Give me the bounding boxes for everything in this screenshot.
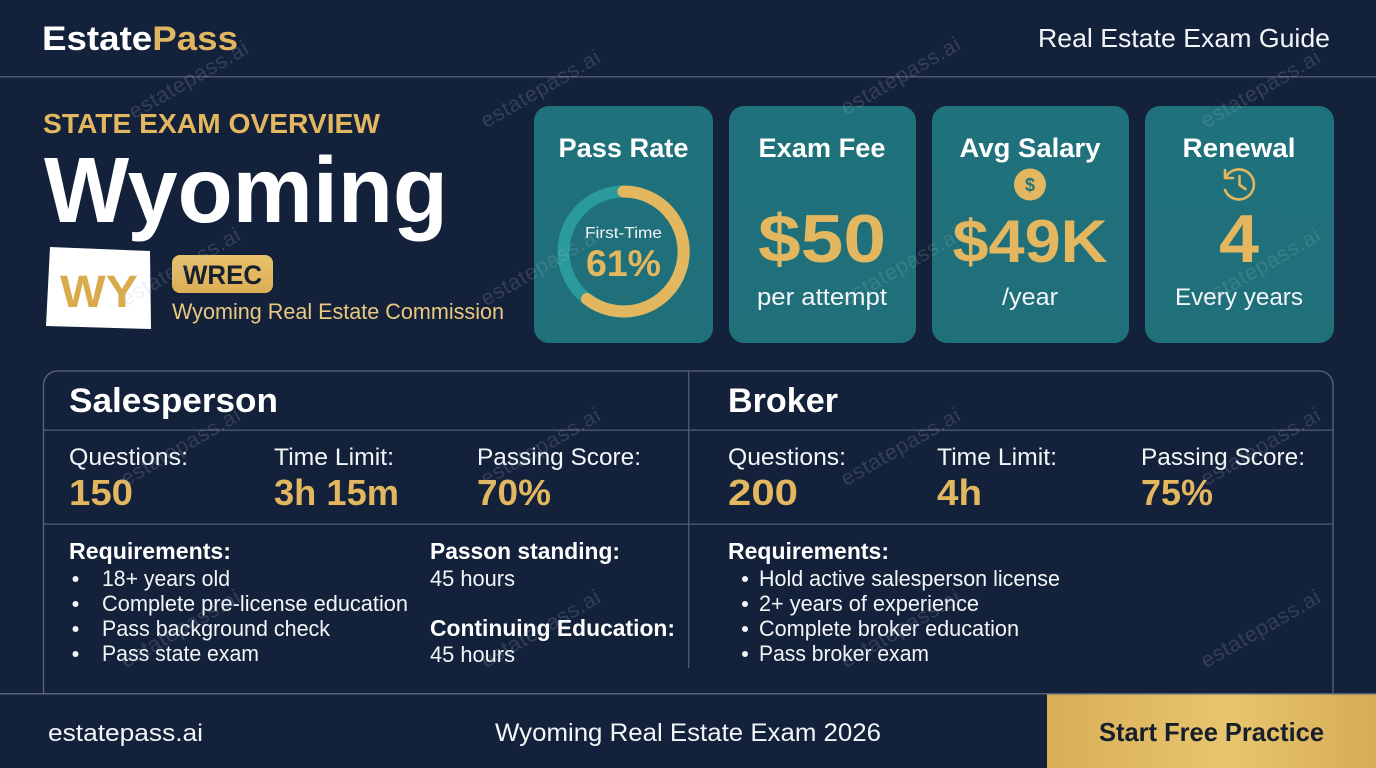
- watermarks: estatepass.ai: [124, 36, 253, 124]
- stat: questions: 200: [728, 472, 798, 513]
- stat: time limit: Time Limit:: [937, 444, 1057, 471]
- watermarks: estatepass.ai: [116, 403, 245, 491]
- logo: EstatePass: [42, 20, 238, 58]
- stat: passing score: 75%: [1141, 472, 1213, 513]
- stat: questions: 150: [69, 472, 133, 513]
- stat: time limit: 4h: [937, 472, 982, 513]
- call to action button: Start Free Practice: [1099, 717, 1324, 747]
- card: exam fee: [729, 106, 916, 343]
- requirements list: 18+ years old: [102, 566, 230, 591]
- watermarks: [116, 32, 1325, 673]
- requirements list: Complete broker education: [759, 616, 1019, 641]
- card: pass rate: Pass Rate: [558, 133, 688, 163]
- stat: time limit: 3h 15m: [274, 472, 399, 513]
- footer title: Wyoming Real Estate Exam 2026: [495, 719, 881, 747]
- icon: dollar coin: [1014, 168, 1046, 200]
- header guide label: Real Estate Exam Guide: [1038, 23, 1330, 53]
- commission name: Wyoming Real Estate Commission: [172, 299, 504, 324]
- stat: passing score: Passing Score:: [477, 444, 641, 471]
- watermarks: estatepass.ai: [836, 32, 965, 120]
- state badge: [46, 247, 151, 329]
- card: average salary: $49K: [952, 208, 1108, 275]
- icon: Wyoming shape: [46, 247, 151, 329]
- stat: time limit: Time Limit:: [274, 444, 394, 471]
- panel: salesperson: [69, 382, 675, 667]
- donut chart: 61%: [586, 243, 661, 284]
- watermarks: estatepass.ai: [836, 585, 965, 673]
- good standing hours: 45 hours: [430, 566, 515, 591]
- card: exam fee: per attempt: [757, 284, 887, 311]
- requirements list: Requirements:: [69, 538, 231, 564]
- icon: history clock: [1225, 169, 1254, 199]
- watermarks: estatepass.ai: [1196, 585, 1325, 673]
- panel: exam details: [43, 371, 1333, 693]
- requirements list: Requirements:: [728, 538, 889, 564]
- watermarks: estatepass.ai: [116, 585, 245, 673]
- card: renewal: Renewal: [1182, 133, 1296, 163]
- header: [0, 20, 1376, 78]
- badge: WREC: WREC: [183, 260, 262, 290]
- watermarks: estatepass.ai: [836, 403, 965, 491]
- donut chart: [564, 191, 684, 312]
- continuing education hours: [430, 615, 675, 667]
- continuing education hours: 45 hours: [430, 642, 515, 667]
- state badge: WY: [60, 266, 138, 317]
- watermarks: estatepass.ai: [476, 403, 605, 491]
- card: exam fee: $50: [758, 201, 886, 277]
- requirements list: [728, 538, 1060, 666]
- panel: salesperson: Salesperson: [69, 382, 278, 420]
- requirements list: [69, 538, 408, 666]
- stat: time limit: [274, 444, 399, 513]
- stat: questions: [728, 444, 846, 513]
- requirements list: Pass state exam: [102, 641, 259, 666]
- requirements list: 2+ years of experience: [759, 591, 979, 616]
- card: pass rate: [534, 106, 713, 343]
- card: exam fee: Exam Fee: [758, 133, 886, 163]
- stat: questions: Questions:: [728, 444, 846, 471]
- icon: dollar coin: $: [1025, 175, 1035, 195]
- stat: time limit: [937, 444, 1057, 513]
- card: average salary: [932, 106, 1129, 343]
- title: Wyoming: [44, 138, 448, 242]
- eyebrow heading: STATE EXAM OVERVIEW: [43, 108, 381, 139]
- stat: questions: [69, 444, 188, 513]
- stat: passing score: 70%: [477, 472, 551, 513]
- requirements list: Pass broker exam: [759, 641, 929, 666]
- watermarks: estatepass.ai: [476, 223, 605, 311]
- card: average salary: Avg Salary: [960, 133, 1100, 163]
- stat: passing score: [477, 444, 641, 513]
- badge: WREC: [172, 255, 273, 293]
- call to action button: [1047, 694, 1376, 768]
- requirements list: Hold active salesperson license: [759, 566, 1060, 591]
- card: average salary: /year: [1002, 284, 1058, 311]
- panel: broker: [728, 382, 1305, 666]
- footer site: estatepass.ai: [48, 720, 203, 747]
- donut chart: First-Time: [585, 225, 662, 242]
- commission: [172, 255, 504, 324]
- good standing hours: [430, 538, 620, 591]
- watermarks: estatepass.ai: [476, 585, 605, 673]
- watermarks: estatepass.ai: [1196, 45, 1325, 133]
- watermarks: estatepass.ai: [836, 223, 965, 311]
- watermarks: estatepass.ai: [476, 45, 605, 133]
- continuing education hours: Continuing Education:: [430, 615, 675, 641]
- panel: broker: Broker: [728, 382, 838, 420]
- watermarks: estatepass.ai: [116, 223, 245, 311]
- stat: questions: Questions:: [69, 444, 188, 471]
- card: renewal: 4: [1219, 201, 1259, 277]
- watermarks: estatepass.ai: [1196, 223, 1325, 311]
- footer: [0, 693, 1376, 768]
- stat: passing score: Passing Score:: [1141, 444, 1305, 471]
- good standing hours: Passon standing:: [430, 538, 620, 564]
- card: renewal: Every years: [1175, 284, 1303, 311]
- card: renewal: [1145, 106, 1334, 343]
- requirements list: Pass background check: [102, 616, 331, 641]
- stat: passing score: [1141, 444, 1305, 513]
- requirements list: Complete pre-license education: [102, 591, 408, 616]
- watermarks: estatepass.ai: [1196, 403, 1325, 491]
